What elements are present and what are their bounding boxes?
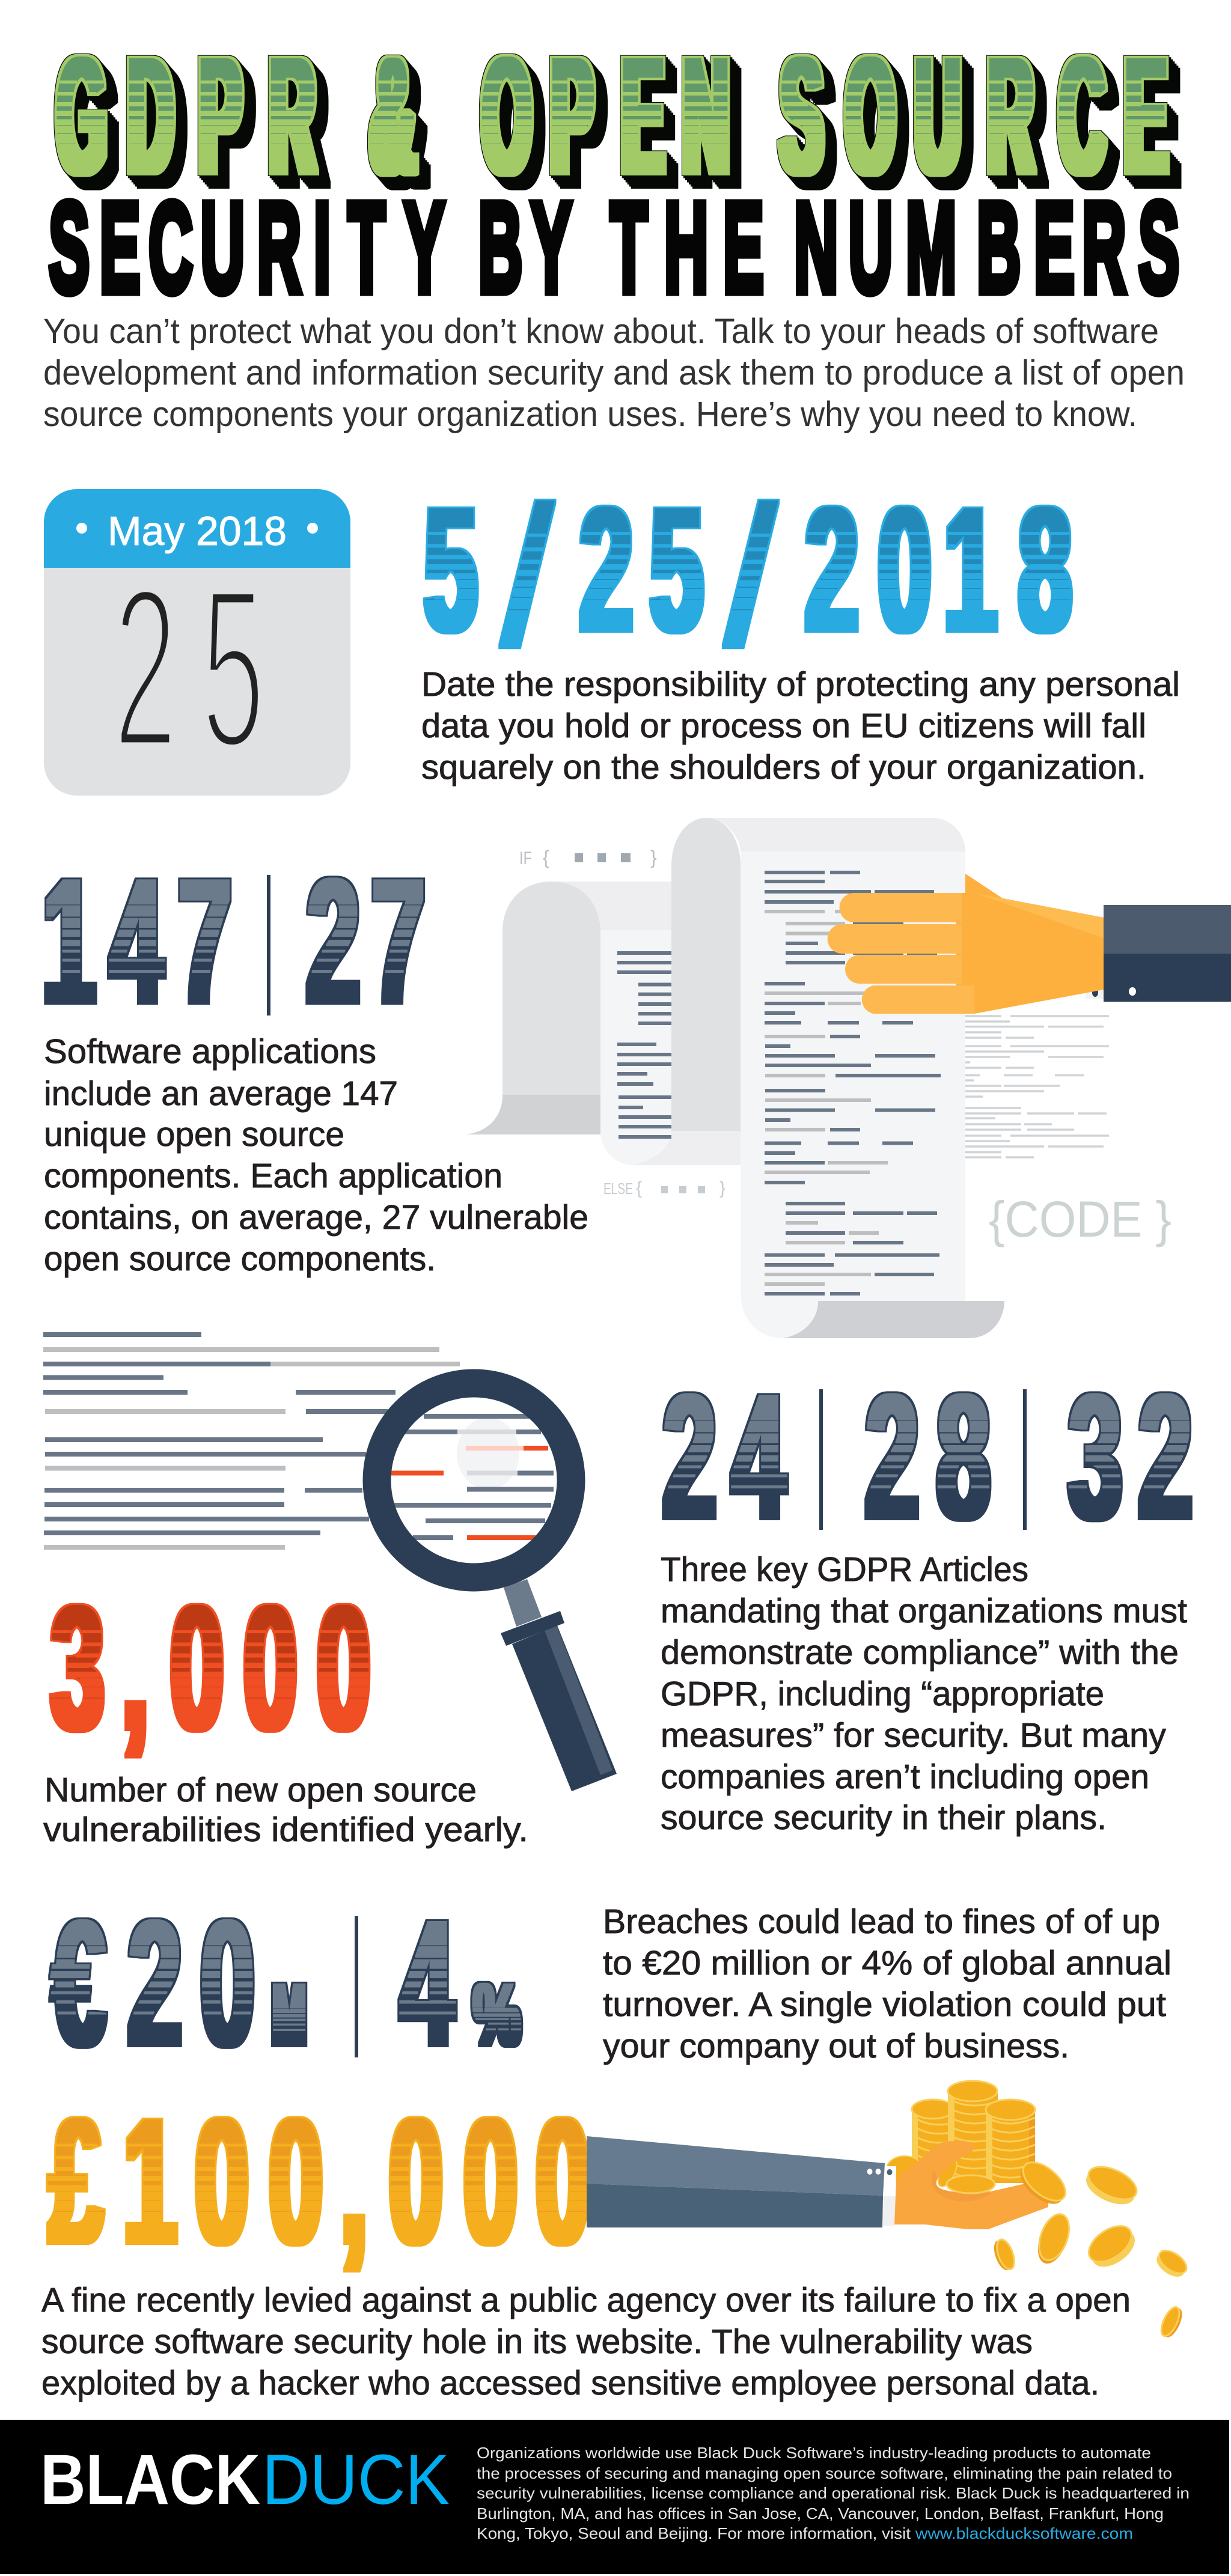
stat: 24 | 28 | 32 bbox=[663, 1358, 1192, 1556]
text: public agency fine: exploited by a hacker who accessed sensitive employee personal data. bbox=[41, 2364, 1099, 2402]
icon: coin stacks bbox=[887, 2081, 1035, 2190]
text: about Black Duck bbox=[477, 2444, 1190, 2542]
title: Security by the numbers: SECURITY BY THE NUMBERS bbox=[49, 177, 1179, 319]
divider: 147 and 27 bbox=[267, 875, 270, 1015]
stat: 147 | 27: 147 bbox=[42, 842, 231, 1040]
big date 5/25/2018: 25 bbox=[579, 471, 703, 668]
text: GDPR articles bbox=[661, 1550, 1187, 1837]
intro text: source components your organization uses. Here’s why you need to know. bbox=[43, 395, 1137, 434]
stat: 3,000: 3,000 bbox=[51, 1570, 370, 1767]
text: public agency fine: A fine recently levied against a public agency over its failure to fix a open bbox=[41, 2281, 1131, 2319]
text: software applications: contains, on average, 27 vulnerable bbox=[44, 1198, 588, 1237]
label: IF braces: } bbox=[650, 847, 657, 868]
stat: pound 100,000: £100,000 bbox=[49, 2083, 589, 2280]
illustration: faded code lines bbox=[965, 1016, 1109, 1157]
big date 5/25/2018: 5 bbox=[424, 471, 477, 668]
text: GDPR articles: companies aren’t including open bbox=[661, 1758, 1149, 1796]
text: about Black Duck: security vulnerabilities, license compliance and operational risk. Black Duck is headquartered in bbox=[477, 2484, 1190, 2502]
label: IF braces bbox=[519, 847, 657, 868]
text: GDPR articles: demonstrate compliance” with the bbox=[661, 1633, 1179, 1672]
label: ELSE braces: } bbox=[719, 1178, 725, 1198]
label: IF braces: IF bbox=[519, 848, 532, 868]
text: GDPR articles: measures” for security. But many bbox=[661, 1716, 1166, 1755]
logo: Black Duck bbox=[40, 2440, 450, 2520]
text: about Black Duck: Burlington, MA, and has offices in San Jose, CA, Vancouver, London, Belfast, Frankfurt, Hong bbox=[477, 2504, 1164, 2523]
text: GDPR articles: mandating that organizations must bbox=[661, 1592, 1187, 1630]
icon: falling coins bbox=[991, 2155, 1190, 2340]
intro text bbox=[43, 312, 1185, 434]
stat: 24 | 28 | 32: 28 bbox=[866, 1358, 990, 1556]
text: software applications: components. Each application bbox=[44, 1157, 502, 1195]
label: ELSE braces: ELSE bbox=[603, 1180, 633, 1198]
icon: hand holding coins bbox=[894, 2140, 1048, 2229]
text: software applications: include an average 147 bbox=[44, 1074, 398, 1113]
text: software applications: Software applications bbox=[44, 1032, 376, 1071]
text: date description: data you hold or process on EU citizens will fall bbox=[421, 707, 1146, 745]
big date 5/25/2018: / bbox=[502, 465, 553, 687]
illustration: main code scroll bbox=[671, 818, 1004, 1338]
text: about Black Duck: Organizations worldwide use Black Duck Software’s industry-leading products to automate bbox=[477, 2444, 1151, 2462]
stat: euro 20M | 4%: M bbox=[273, 1965, 306, 2064]
text: breaches bbox=[603, 1902, 1171, 2065]
icon: calendar: May 2018 bbox=[108, 508, 287, 554]
icon: hand holding scroll bbox=[828, 874, 1231, 1014]
text: breaches: turnover. A single violation could put bbox=[603, 1985, 1166, 2024]
divider: articles bbox=[819, 1389, 1027, 1530]
text: breaches: to €20 million or 4% of global annual bbox=[603, 1944, 1171, 1982]
stat: 147 | 27 bbox=[42, 842, 425, 1040]
label: IF braces: { bbox=[543, 847, 549, 868]
stat: 147 | 27: 27 bbox=[307, 842, 425, 1040]
text: new vulnerabilities: vulnerabilities identified yearly. bbox=[43, 1810, 528, 1849]
text: breaches: Breaches could lead to fines of of up bbox=[603, 1902, 1160, 1941]
footer panel bbox=[0, 2420, 1229, 2574]
text: GDPR articles: Three key GDPR Articles bbox=[661, 1550, 1028, 1589]
text: GDPR articles: source security in their plans. bbox=[661, 1798, 1107, 1837]
text: about Black Duck: Kong, Tokyo, Seoul and Beijing. For more information, visit bbox=[477, 2524, 911, 2542]
icon: calendar: 25 bbox=[114, 540, 265, 796]
stat: euro 20M | 4% bbox=[52, 1883, 521, 2083]
icon: arm in suit sleeve bbox=[587, 2136, 896, 2227]
label: {CODE}: {CODE } bbox=[989, 1191, 1171, 1247]
illustration: document lines bbox=[43, 1335, 460, 1547]
stat: 24 | 28 | 32: 32 bbox=[1069, 1358, 1192, 1556]
big date 5/25/2018: 2018 bbox=[805, 471, 1072, 668]
stat: euro 20M | 4%: % bbox=[473, 1965, 521, 2064]
text: breaches: your company out of business. bbox=[603, 2027, 1069, 2065]
label: ELSE braces bbox=[603, 1178, 725, 1198]
label: ELSE braces: { bbox=[636, 1178, 642, 1198]
icon: magnifying glass bbox=[377, 1383, 617, 1791]
stat: 24 | 28 | 32: 24 bbox=[663, 1358, 786, 1556]
text: date description: Date the responsibility of protecting any personal bbox=[421, 665, 1180, 704]
divider: fines bbox=[355, 1916, 358, 2057]
text: software applications: open source components. bbox=[44, 1240, 436, 1278]
text: new vulnerabilities: Number of new open source bbox=[44, 1771, 477, 1809]
text: about Black Duck: the processes of securing and managing open source software, eliminating the pain related to bbox=[477, 2464, 1172, 2482]
stat: euro 20M | 4%: 4 bbox=[400, 1883, 454, 2083]
icon: calendar bbox=[44, 489, 350, 796]
logo: Black Duck: BLACK bbox=[40, 2440, 260, 2520]
intro text: development and information security and ask them to produce a list of open bbox=[43, 353, 1185, 392]
stat: euro 20M | 4%: €20 bbox=[52, 1883, 254, 2083]
text: about Black Duck: www.blackducksoftware.com bbox=[915, 2524, 1133, 2542]
text: software applications: unique open source bbox=[44, 1115, 344, 1154]
intro text: You can’t protect what you don’t know about. Talk to your heads of software bbox=[43, 312, 1159, 351]
illustration: back code scroll bbox=[465, 882, 741, 1165]
title: GDPR & Open Source: GDPR & OPEN SOURCE bbox=[57, 24, 1167, 208]
text: date description bbox=[421, 665, 1180, 787]
text: public agency fine bbox=[41, 2281, 1131, 2402]
big date 5/25/2018: / bbox=[726, 465, 776, 687]
text: date description: squarely on the shoulders of your organization. bbox=[421, 748, 1146, 787]
text: new vulnerabilities bbox=[43, 1771, 528, 1849]
text: public agency fine: source software security hole in its website. The vulnerability was bbox=[41, 2322, 1033, 2361]
text: software applications bbox=[44, 1032, 588, 1278]
text: GDPR articles: GDPR, including “appropriate bbox=[661, 1675, 1104, 1713]
logo: Black Duck: DUCK bbox=[262, 2440, 450, 2520]
big date 5/25/2018 bbox=[424, 465, 1072, 687]
